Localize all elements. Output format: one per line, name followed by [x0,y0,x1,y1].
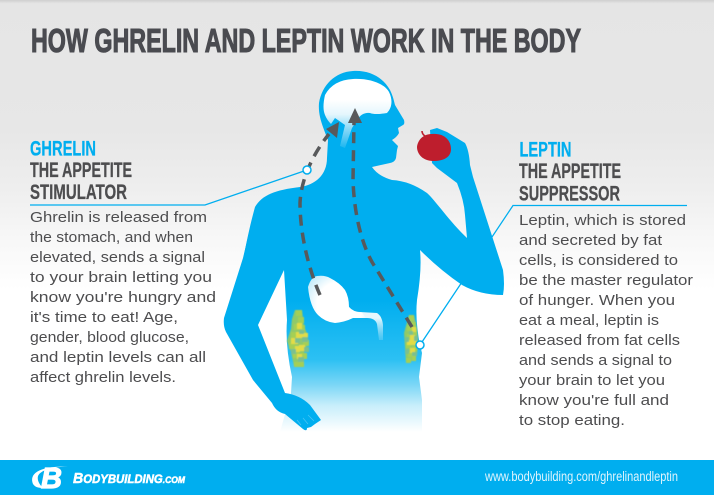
body figure [224,71,504,432]
footer bar [0,460,714,495]
callout line: ghrelin [30,170,307,205]
callout marker: leptin [416,341,424,349]
text block: leptin: and secreted by fat [519,232,663,249]
text block: ghrelin: know you're hungry and [30,289,216,306]
text block: leptin: Leptin, which is stored [519,212,686,229]
finger lines [297,415,314,425]
text block: leptin [519,212,693,429]
logo: BODYBUILDING.COM [73,470,185,487]
arrow: ghrelin path [300,122,339,295]
callout marker: ghrelin [303,166,311,174]
text block: leptin: of hunger. When you [519,292,675,309]
arrow: leptin path [348,108,412,327]
text block: leptin: released from fat cells [519,332,680,349]
logo [32,463,185,495]
heading: leptin: SUPPRESSOR [519,182,620,206]
body silhouette [243,71,504,432]
stomach [308,276,383,340]
text block: ghrelin: the stomach, and when [30,229,193,246]
text block: leptin: to stop eating. [519,412,625,429]
left arm [224,220,321,430]
text block: leptin: and sends a signal to [519,352,672,369]
callout line: leptin [420,206,687,345]
text block: ghrelin: to your brain letting you [30,269,212,286]
text block: ghrelin: elevated, sends a signal [30,249,205,266]
brain [324,79,391,148]
apple [417,131,451,161]
heading: leptin [519,138,621,206]
heading: leptin: THE APPETITE [519,159,621,183]
text block: leptin: cells, is considered to [519,252,678,269]
text block: leptin: know you're full and [519,392,669,409]
logo: B [41,463,62,495]
heading: ghrelin: STIMULATOR [30,180,127,204]
left fat cells [287,310,309,367]
text block: leptin: eat a meal, leptin is [519,312,659,329]
heading: ghrelin: GHRELIN [30,136,96,160]
right fat cells [404,315,418,363]
heading: ghrelin [30,136,132,204]
text block: ghrelin: it's time to eat! Age, [30,309,178,326]
text block: ghrelin: gender, blood glucose, [30,329,189,346]
background [0,0,714,300]
text block: leptin: be the master regulator [519,272,693,289]
text block: ghrelin [30,209,216,386]
text block: ghrelin: Ghrelin is released from [30,209,207,226]
text block: leptin: your brain to let you [519,372,665,389]
heading: ghrelin: THE APPETITE [30,158,132,182]
heading: leptin: LEPTIN [520,138,572,162]
text block: ghrelin: and leptin levels can all [30,349,206,366]
text block: ghrelin: affect ghrelin levels. [30,369,176,386]
